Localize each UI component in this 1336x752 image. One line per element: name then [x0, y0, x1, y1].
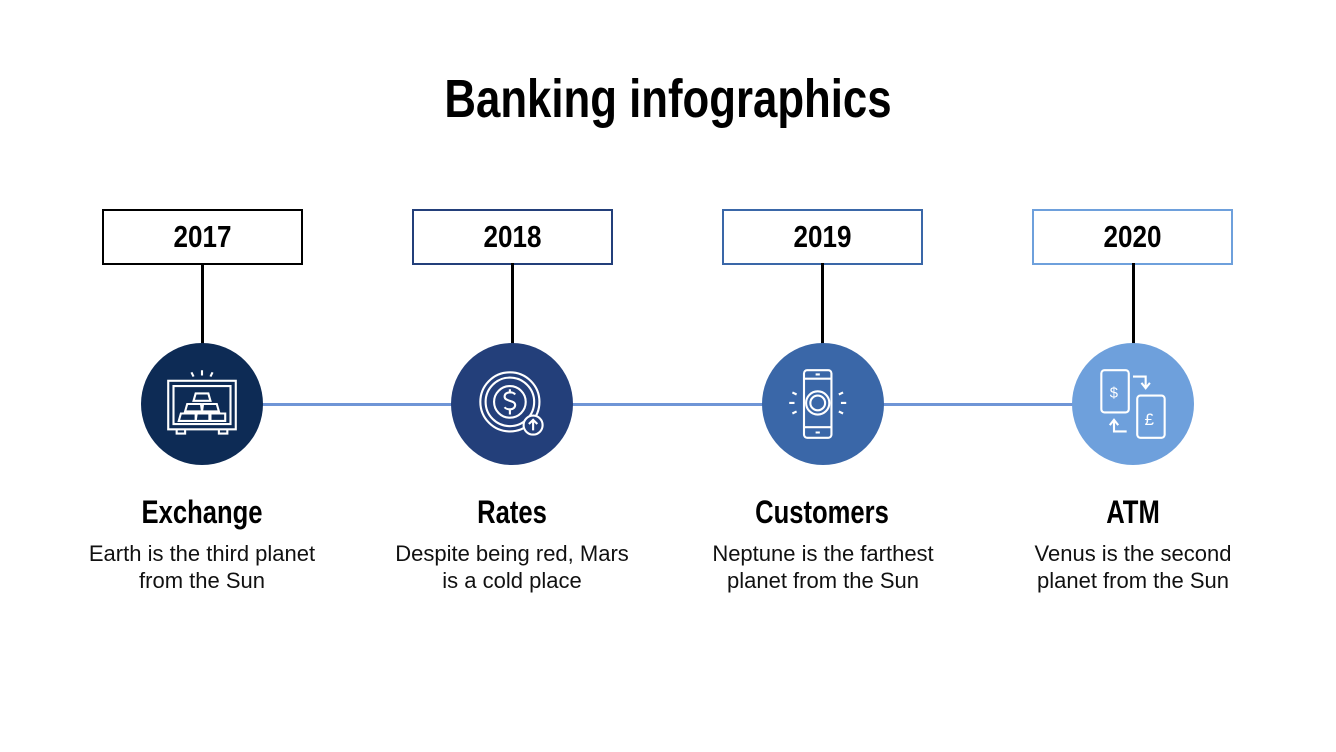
year box 2017: [102, 209, 303, 265]
text 1: Earth is the third planet: [89, 541, 315, 566]
year box 2020: 2020: [1104, 219, 1161, 254]
text 2: is a cold place: [442, 568, 582, 593]
text 1: from the Sun: [139, 568, 265, 593]
year box 2017: 2017: [174, 219, 231, 254]
icon: gold safe: [141, 343, 263, 465]
heading ATM: ATM: [1106, 494, 1160, 530]
icon: phone payment: [762, 343, 884, 465]
heading Rates: Rates: [477, 494, 547, 530]
timeline line: [202, 403, 1133, 406]
year box 2020: [1032, 209, 1233, 265]
heading Customers: Customers: [755, 494, 889, 530]
icon: currency exchange: [1072, 343, 1194, 465]
text 4: Venus is the second: [1035, 541, 1231, 566]
connector 2020: [1132, 263, 1135, 345]
year box 2019: 2019: [794, 219, 851, 254]
connector 2018: [511, 263, 514, 345]
text 3: planet from the Sun: [727, 568, 919, 593]
text 2: Despite being red, Mars: [395, 541, 629, 566]
title: Banking infographics: [444, 69, 892, 129]
year box 2018: 2018: [484, 219, 541, 254]
icon: currency exchange: £: [1145, 410, 1155, 429]
connector 2017: [201, 263, 204, 345]
text 3: Neptune is the farthest: [712, 541, 934, 566]
text 2: [395, 541, 629, 593]
heading Exchange: Exchange: [142, 494, 262, 530]
year box 2018: [412, 209, 613, 265]
connector 2019: [821, 263, 824, 345]
text 4: planet from the Sun: [1037, 568, 1229, 593]
text 1: [89, 541, 315, 593]
icon: dollar coin: [451, 343, 573, 465]
text 4: [1034, 541, 1231, 593]
text 3: [712, 541, 934, 593]
year box 2019: [722, 209, 923, 265]
icon: currency exchange: $: [1110, 386, 1118, 402]
